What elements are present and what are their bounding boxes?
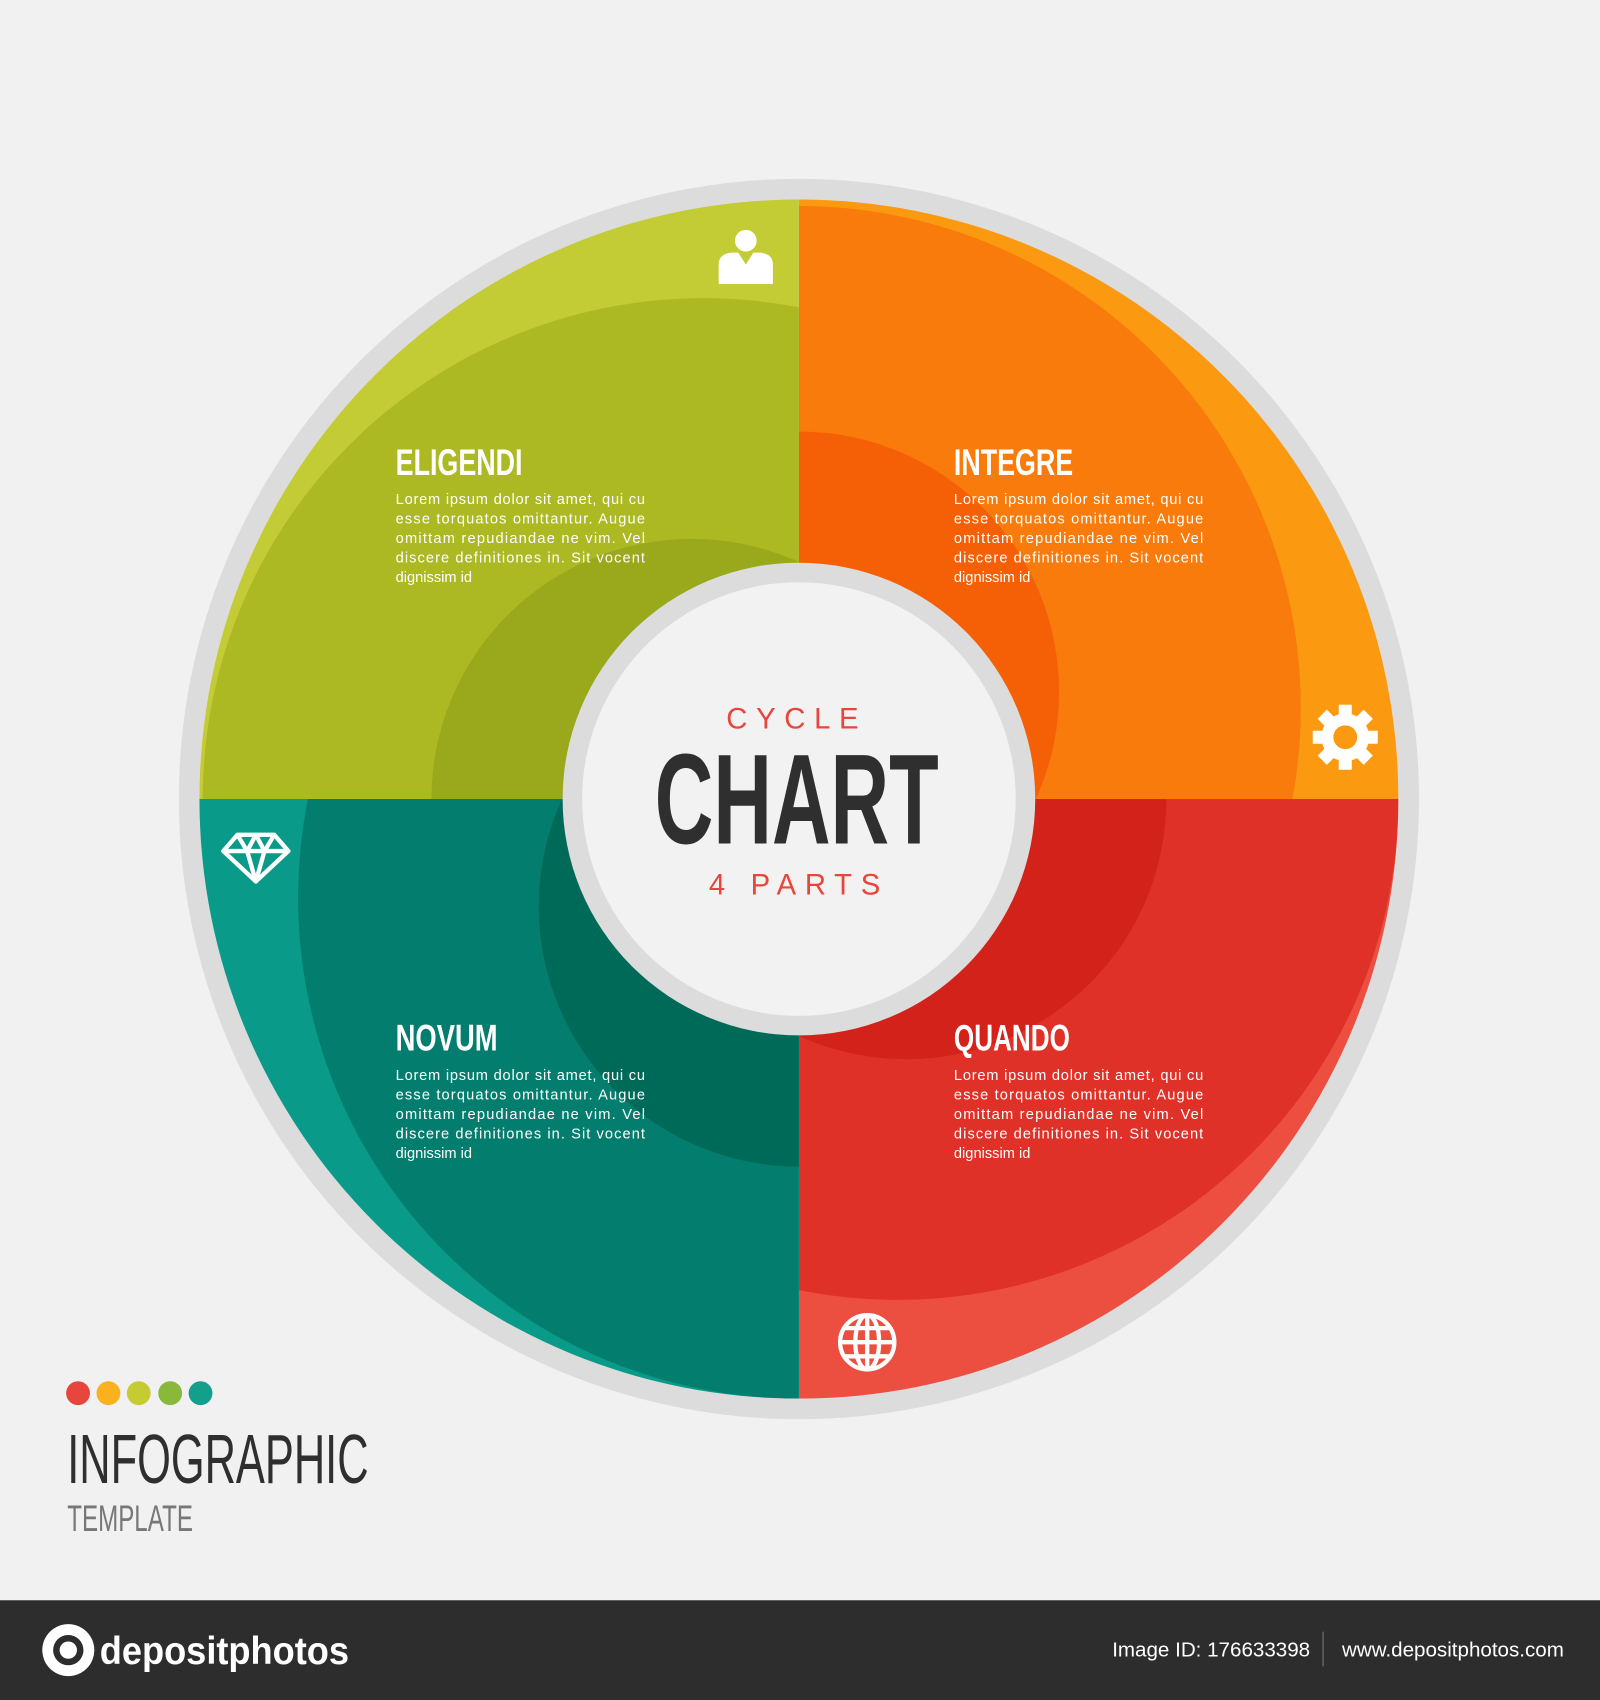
text block: novum: omittam repudiandae ne vim. Vel xyxy=(396,1107,645,1123)
footer bar: Image ID: 176633398 xyxy=(1112,1639,1310,1662)
outer ring xyxy=(179,179,1419,1419)
text block: quando xyxy=(954,1018,1203,1162)
text block: integre: Lorem ipsum dolor sit amet, qui cu xyxy=(954,492,1203,508)
text block: quando: Lorem ipsum dolor sit amet, qui cu xyxy=(954,1068,1203,1084)
title: infographic template: INFOGRAPHIC xyxy=(67,1420,369,1498)
text block: eligendi: omittam repudiandae ne vim. Vel xyxy=(396,531,645,547)
panel: quando quadrant xyxy=(799,799,1398,1399)
text block: eligendi: discere definitiones in. Sit vocent xyxy=(396,551,645,567)
text block: novum: Lorem ipsum dolor sit amet, qui cu xyxy=(396,1068,645,1084)
title: infographic template: TEMPLATE xyxy=(67,1498,193,1539)
center title: CYCLE xyxy=(726,704,867,736)
center title: CHART xyxy=(655,728,939,871)
text block: quando: discere definitiones in. Sit vocent xyxy=(954,1126,1203,1142)
text block: eligendi: dignissim id xyxy=(396,570,472,586)
legend dots xyxy=(66,1381,212,1405)
text block: novum: dignissim id xyxy=(396,1146,472,1162)
text block: integre: INTEGRE xyxy=(954,442,1073,483)
text block: integre: omittam repudiandae ne vim. Vel xyxy=(954,531,1203,547)
text block: eligendi: ELIGENDI xyxy=(396,442,522,483)
icon: diamond xyxy=(223,835,288,881)
text block: novum xyxy=(396,1018,645,1162)
text block: eligendi: esse torquatos omittantur. Augue xyxy=(396,512,645,528)
footer bar: www.depositphotos.com xyxy=(1341,1639,1564,1662)
icon: person xyxy=(719,230,773,284)
icon: gear xyxy=(1313,705,1378,770)
text block: quando: dignissim id xyxy=(954,1146,1030,1162)
text block: eligendi: Lorem ipsum dolor sit amet, qui cu xyxy=(396,492,645,508)
text block: integre xyxy=(954,442,1203,586)
text block: quando: omittam repudiandae ne vim. Vel xyxy=(954,1107,1203,1123)
text block: quando: esse torquatos omittantur. Augue xyxy=(954,1087,1203,1103)
center circle xyxy=(563,563,1035,1035)
text block: integre: esse torquatos omittantur. Augue xyxy=(954,512,1203,528)
footer bar: depositphotos xyxy=(100,1630,349,1673)
text block: novum: NOVUM xyxy=(396,1018,498,1059)
center title xyxy=(655,704,939,901)
footer bar xyxy=(0,1600,1600,1700)
panel: novum quadrant xyxy=(200,799,799,1399)
center title: 4 PARTS xyxy=(709,869,889,901)
text block: integre: discere definitiones in. Sit vocent xyxy=(954,551,1203,567)
panel: eligendi quadrant xyxy=(200,200,799,799)
text block: eligendi xyxy=(396,442,645,586)
text block: integre: dignissim id xyxy=(954,570,1030,586)
text block: quando: QUANDO xyxy=(954,1018,1070,1059)
panel: integre quadrant xyxy=(799,200,1398,799)
icon: globe xyxy=(840,1315,894,1369)
title: infographic template xyxy=(67,1420,369,1539)
text block: novum: esse torquatos omittantur. Augue xyxy=(396,1087,645,1103)
text block: novum: discere definitiones in. Sit vocent xyxy=(396,1126,645,1142)
